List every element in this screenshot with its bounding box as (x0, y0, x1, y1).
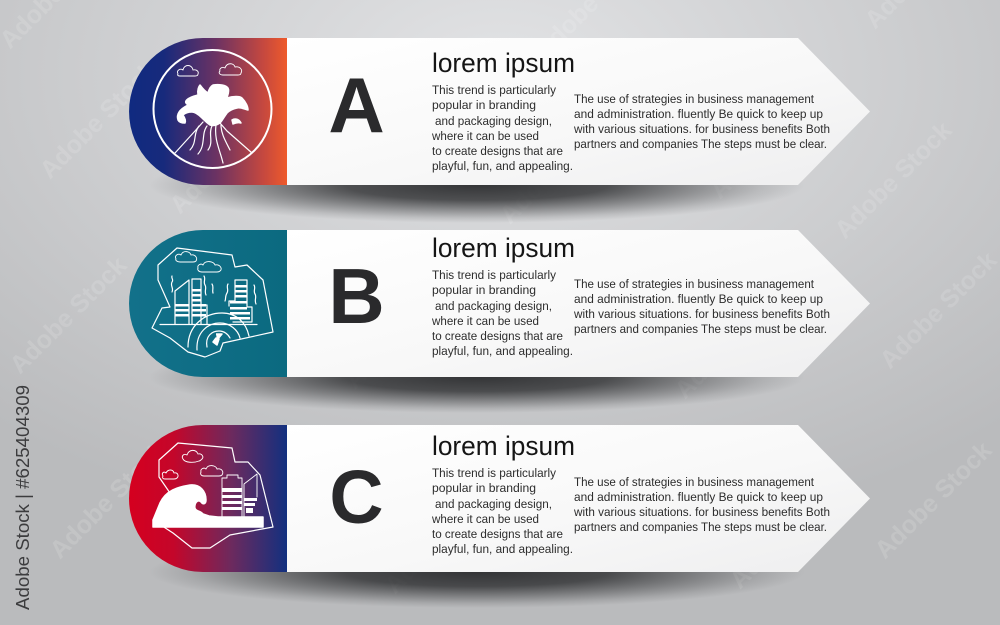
left text A: popular in branding (432, 98, 536, 112)
right text C: partners and companies The steps must be clear. (574, 520, 827, 534)
left text A: This trend is particularly (432, 83, 557, 97)
stock watermarks: Adobe Stock (669, 276, 797, 404)
left text B: to create designs that are (432, 329, 563, 343)
left text A: and packaging design, (435, 114, 552, 128)
shadow C (149, 536, 805, 608)
right text A: The use of strategies in business management (574, 92, 815, 106)
heading B: lorem ipsum (432, 233, 575, 263)
colour cap C (129, 425, 287, 572)
left text B: and packaging design, (435, 299, 552, 313)
heading A: lorem ipsum (432, 48, 575, 78)
left text A (431, 83, 573, 173)
right text A (573, 92, 830, 151)
colour cap B (129, 230, 287, 377)
icon: earthquake city (152, 248, 273, 357)
left text C: playful, fun, and appealing. (432, 542, 573, 556)
left text C: where it can be used (431, 512, 539, 526)
letter A: A (328, 61, 385, 149)
stock watermarks: Adobe Stock (4, 251, 132, 379)
left text B: where it can be used (431, 314, 539, 328)
left text C (431, 466, 573, 556)
arrow body B (287, 230, 870, 377)
arrow body C (287, 425, 870, 572)
stock watermarks: Adobe Stock (829, 116, 957, 244)
shadow A (149, 147, 805, 223)
stock watermarks: Adobe Stock (164, 91, 292, 219)
right text A: partners and companies The steps must be clear. (574, 137, 827, 151)
letter C: C (329, 455, 384, 539)
stock watermarks: Adobe Stock (874, 246, 1000, 374)
letter B: B (328, 252, 385, 340)
left text A: playful, fun, and appealing. (432, 159, 573, 173)
right text C (573, 475, 830, 534)
left text A: to create designs that are (432, 144, 563, 158)
panel A (129, 38, 870, 223)
left text B: popular in branding (432, 283, 536, 297)
stock watermarks: Adobe Stock (704, 76, 832, 204)
arrow body A (287, 38, 870, 185)
left text B (431, 268, 573, 358)
stock watermarks: Adobe Stock (724, 466, 852, 594)
stock watermarks: Adobe Stock (869, 436, 997, 564)
stock watermarks: Adobe (344, 119, 419, 194)
right text B: partners and companies The steps must be clear. (574, 322, 827, 336)
left text C: to create designs that are (432, 527, 563, 541)
stock watermarks: Adobe Stock (44, 436, 172, 564)
right text B: The use of strategies in business management (574, 277, 815, 291)
stock watermarks: Adobe Stock (34, 56, 162, 184)
stock id label: Adobe Stock | #625404309 (12, 385, 33, 610)
right text A: and administration. fluently Be quick to keep up (574, 107, 823, 121)
left text C: and packaging design, (435, 497, 552, 511)
right text C: and administration. fluently Be quick to keep up (574, 490, 823, 504)
right text B (573, 277, 830, 336)
right text A: with various situations. for business benefits Both (573, 122, 830, 136)
right text B: and administration. fluently Be quick to keep up (574, 292, 823, 306)
colour cap A (129, 38, 287, 185)
icon: tsunami city (153, 443, 273, 548)
stock watermarks: Adobe Stock (494, 101, 622, 229)
shadow B (149, 341, 805, 413)
left text B: playful, fun, and appealing. (432, 344, 573, 358)
left text C: This trend is particularly (432, 466, 557, 480)
panel B (129, 230, 870, 413)
panel C (129, 425, 870, 608)
right text C: The use of strategies in business management (574, 475, 815, 489)
right text B: with various situations. for business benefits Both (573, 307, 830, 321)
icon: volcano (154, 50, 272, 168)
right text C: with various situations. for business benefits Both (573, 505, 830, 519)
left text C: popular in branding (432, 481, 536, 495)
stock watermarks: Adobe Stock (339, 266, 467, 394)
left text A: where it can be used (431, 129, 539, 143)
left text B: This trend is particularly (432, 268, 557, 282)
stock watermarks: Adobe Stock (379, 471, 507, 599)
heading C: lorem ipsum (432, 431, 575, 461)
